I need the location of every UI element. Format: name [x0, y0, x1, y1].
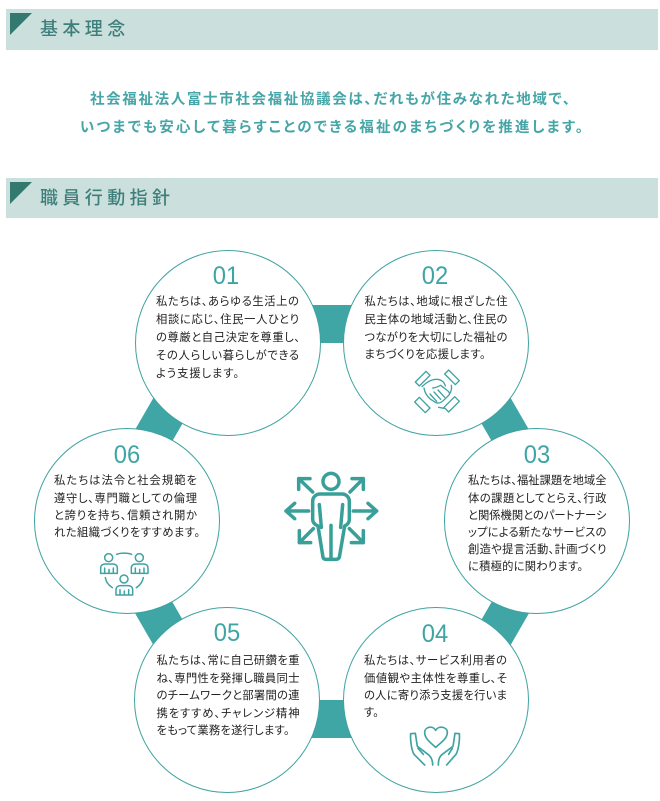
- text 02: 私たちは、地域に根ざした住: [364, 294, 508, 308]
- heading triangle marker: [10, 182, 32, 204]
- heading triangle marker: [10, 13, 32, 35]
- text 03: と関係機関とのパートナーシ: [468, 509, 607, 522]
- text 04: す。: [364, 706, 379, 719]
- text 01: その人らしい暮らしができる: [156, 348, 299, 362]
- person: [313, 473, 349, 559]
- panel: principle 05: [134, 607, 320, 793]
- text 01: 相談に応じ、住民一人ひとり: [156, 312, 299, 326]
- heading text: 基本理念: [40, 19, 130, 39]
- mission statement text: いつまでも安心して暮らすことのできる福祉のまちづくりを推進します。: [80, 118, 583, 136]
- text 05: 私たちは、常に自己研鑽を重: [156, 653, 300, 667]
- number 05: 05: [214, 619, 240, 647]
- section heading band: 基本理念: [6, 9, 658, 50]
- mission statement text: 社会福祉法人富士市社会福祉協議会は、だれもが住みなれた地域で、: [90, 90, 570, 108]
- text 03: ップによる新たなサービスの: [468, 526, 606, 539]
- center icon: person with arrows: [284, 472, 378, 562]
- text 01: の尊厳と自己決定を尊重し、: [156, 330, 300, 344]
- text 03: 私たちは、福祉課題を地域全: [468, 473, 606, 487]
- text 06: 私たちは法令と社会規範を: [54, 473, 197, 487]
- number 04: 04: [422, 620, 448, 648]
- icon: joined hands: [414, 369, 460, 414]
- section heading band: 職員行動指針: [6, 178, 658, 218]
- text 05: をもって業務を遂行します。: [156, 723, 290, 737]
- text 02: 民主体の地域活動と、住民の: [364, 312, 508, 326]
- text 01: [156, 294, 300, 380]
- text 06: [54, 473, 200, 539]
- number 02: 02: [422, 262, 448, 290]
- number 03: 03: [524, 441, 550, 469]
- panel: principle 06: [34, 428, 220, 614]
- arrows: [286, 479, 377, 543]
- text 04: 価値観や主体性を尊重し、そ: [364, 671, 507, 685]
- icon: heart in hands: [410, 726, 460, 766]
- text 01: 私たちは、あらゆる生活上の: [156, 294, 299, 308]
- text 06: と誇りを持ち、信頼され開か: [54, 508, 197, 522]
- text 03: [468, 473, 607, 573]
- text 03: 体の課題としてとらえ、行政: [468, 491, 606, 505]
- text 06: 遵守し、専門職としての倫理: [54, 491, 197, 505]
- text 03: に積極的に関わります。: [468, 559, 583, 573]
- text 05: ね、専門性を発揮し職員同士: [156, 671, 300, 685]
- mission statement text: [80, 90, 583, 136]
- text 03: 創造や提言活動、計画づくり: [468, 542, 606, 556]
- text 02: [364, 294, 508, 361]
- number 01: 01: [213, 262, 239, 290]
- text 04: 私たちは、サービス利用者の: [364, 654, 507, 667]
- panel: principle 01: [134, 250, 320, 436]
- number 06: 06: [114, 441, 140, 469]
- text 01: よう支援します。: [156, 366, 239, 380]
- text 04: [364, 654, 507, 719]
- panel: principle 02: [343, 250, 529, 436]
- text 02: つながりを大切にした福祉の: [364, 330, 508, 344]
- text 05: [156, 653, 300, 737]
- panel: principle 04: [343, 607, 529, 793]
- text 06: れた組織づくりをすすめます。: [54, 525, 200, 539]
- heading text: 職員行動指針: [40, 188, 174, 208]
- panel: principle 03: [444, 428, 630, 614]
- text 05: のチームワークと部署間の連: [156, 688, 300, 702]
- icon: three people in a circle: [100, 552, 149, 596]
- text 02: まちづくりを応援します。: [364, 347, 486, 361]
- text 05: 携をすすめ、チャレンジ精神: [156, 706, 300, 720]
- text 04: の人に寄り添う支援を行いま: [364, 688, 507, 702]
